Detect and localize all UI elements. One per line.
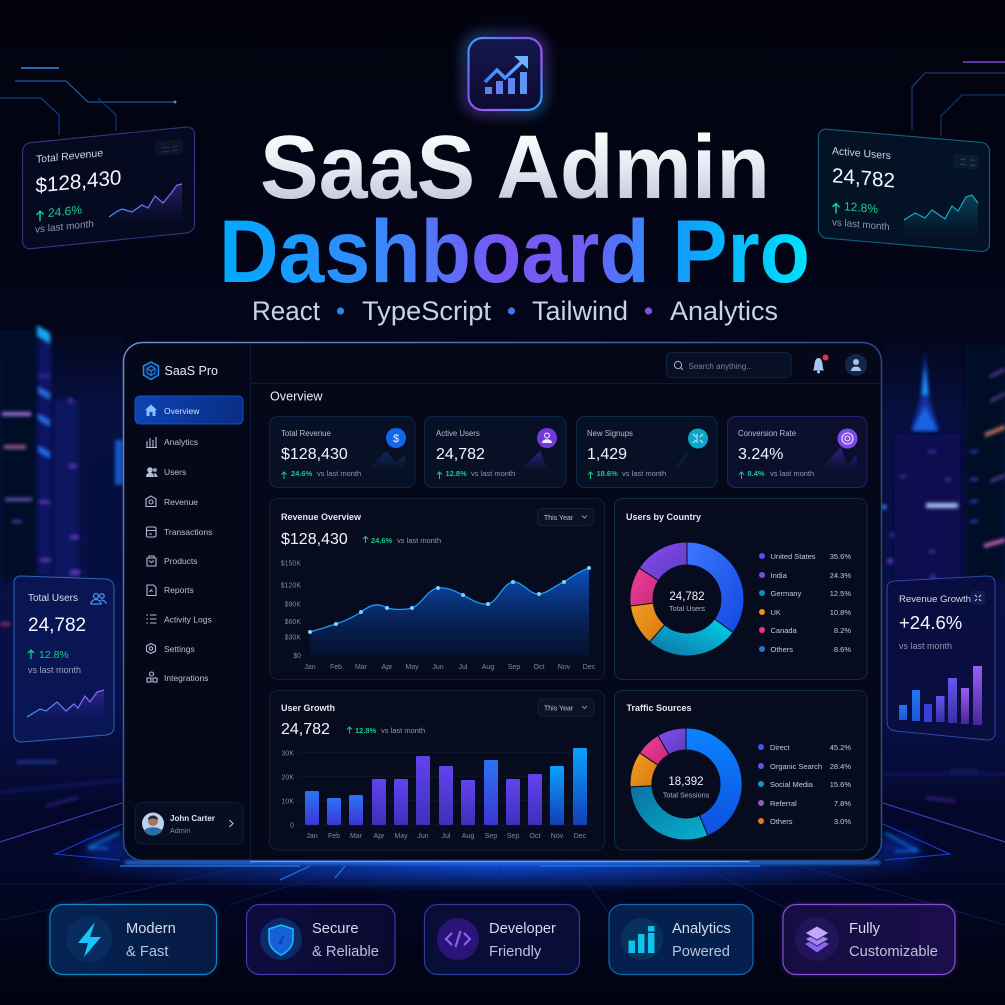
year filter: This Year [544,706,574,712]
line chart axes: Aug [482,664,494,671]
traffic legend: 15.6% [830,780,851,789]
nav: integrations [147,672,208,683]
panel: users by country [614,498,867,680]
nav: products [147,556,198,566]
overview heading: Overview [270,390,323,404]
country legend: 8.6% [834,645,851,654]
panel: user growth [270,690,604,850]
traffic legend: Others [770,817,793,826]
bar axes: 30K [282,750,294,758]
bar axes: Jan [306,833,318,840]
title: SaaS Admin [260,118,770,218]
floating card: revenue growth: vs last month [899,641,952,651]
floating card: total users: 12.8% [39,649,69,661]
bell icon [813,354,828,374]
line chart axes: $120K [281,582,301,590]
panel: revenue overview: Revenue Overview [281,512,362,522]
city skyline left [0,320,125,808]
kpi: total revenue: Total Revenue [281,429,331,438]
floating card: revenue growth: Revenue Growth [899,594,971,605]
traffic legend: Organic Search [770,762,822,771]
feature: secure and reliable: Secure [312,921,359,937]
floating card: active users: vs last month [832,217,890,233]
kpi: total revenue: vs last month [317,469,361,478]
traffic legend [758,743,851,826]
feature: developer friendly: Developer [489,921,556,937]
title: Dashboard Pro [219,201,810,301]
kpi: conversion rate: Conversion Rate [738,429,796,438]
dashboard window [124,342,882,860]
line chart axes [281,560,596,671]
line chart axes: $60K [285,619,301,626]
subtitle tech stack: React [252,296,320,326]
feature: developer friendly: Friendly [489,944,542,960]
panel: revenue overview: 24.6% [371,536,393,545]
traffic legend: Direct [770,743,791,752]
panel: traffic sources [614,690,867,850]
floating card: total users: vs last month [28,665,81,675]
circuit lines right [912,62,1005,136]
nav: users: Users [164,467,186,477]
bar axes: May [394,833,408,840]
feature: analytics powered: Powered [672,944,730,960]
panel: user growth: 24,782 [281,721,330,738]
traffic legend: Social Media [770,780,814,789]
feature: developer friendly [424,904,580,974]
country legend [759,552,851,654]
bar axes: Sep [485,833,497,840]
floating card: active users: 12.8% [844,199,878,216]
neon floor [0,803,1005,925]
kpi: conversion rate [728,416,867,488]
nav: integrations: Integrations [164,673,208,683]
panel: revenue overview: vs last month [397,536,441,545]
year filter [538,699,594,716]
floating card: active users: 24,782 [832,164,895,193]
floating card: total users: Total Users [28,593,78,604]
kpi: new signups: vs last month [622,469,666,478]
feature: secure and reliable [246,904,395,974]
kpi: total revenue: $128,430 [281,446,348,463]
feature: analytics powered [609,904,753,974]
floating card: revenue growth: +24.6% [899,612,962,633]
bar axes: Feb [328,833,340,840]
year filter [538,508,594,526]
line chart axes: Mar [355,664,368,671]
bar axes: 20K [282,774,294,782]
user profile box: John Carter [170,814,215,823]
kpi: active users: vs last month [471,469,515,478]
panel: user growth: vs last month [381,726,425,735]
user profile box: Admin [170,826,190,835]
kpi: new signups: 1,429 [587,446,627,463]
brand logo: SaaS Pro [164,364,218,378]
country legend: 10.8% [830,608,851,617]
panel: traffic sources: Traffic Sources [626,703,692,713]
floating card: total revenue: Total Revenue [36,147,103,166]
nav: activity logs: Activity Logs [164,614,212,624]
line chart axes: $150K [281,560,301,568]
feature: fully customizable: Customizable [849,944,938,960]
title [219,118,810,301]
bar axes: Mar [350,833,363,840]
country donut: 24,782 [669,591,705,603]
feature: modern and fast [50,904,216,974]
feature: modern and fast: Modern [126,921,176,937]
nav: overview active: Overview [164,406,200,416]
floating card: active users [818,129,990,252]
kpi: conversion rate: 3.24% [738,446,783,463]
revenue area line [308,566,591,655]
traffic legend: 28.4% [830,762,851,771]
subtitle tech stack: Analytics [670,296,778,326]
floating card: total revenue: $128,430 [36,166,121,198]
country legend: Others [770,645,793,654]
kpi: new signups: New Signups [587,429,633,438]
top bar [666,352,867,378]
traffic legend: Referral [770,799,797,808]
country legend: India [770,571,788,580]
bar axes: Aug [462,833,474,840]
line chart axes: Jul [459,664,468,671]
feature: fully customizable: Fully [849,921,881,937]
nav: users [146,467,186,477]
floating card: total revenue: 24.6% [48,203,82,220]
floating card: active users: Active Users [832,145,891,162]
country legend: 12.5% [830,589,851,598]
nav: revenue: Revenue [164,497,198,507]
nav: settings: Settings [164,644,195,654]
line chart axes: Apr [382,664,393,671]
bar axes: Oct [530,833,540,840]
bar axes: Dec [574,833,587,840]
bar axes: Sep [507,833,519,840]
country legend: United States [770,552,816,561]
floating card: total users: 24,782 [28,615,86,636]
nav: reports: Reports [164,585,194,595]
traffic donut: 18,392 [668,776,704,788]
kpi: total revenue [270,416,415,488]
kpi: active users: 12.8% [446,469,467,478]
line chart axes: Sep [508,664,520,671]
floating card: revenue growth [887,576,995,740]
feature: analytics powered: Analytics [672,921,731,937]
bar axes: Nov [551,833,564,840]
subtitle tech stack [252,296,778,326]
country legend: 8.2% [834,626,851,635]
line chart axes: Dec [583,664,596,671]
profile icon [845,354,867,376]
kpi: total revenue: 24.6% [291,469,313,478]
brand logo [144,362,218,380]
nav: revenue [146,496,198,507]
kpi: new signups: 18.6% [596,469,618,478]
traffic legend: 45.2% [830,743,851,752]
kpi: conversion rate: vs last month [770,469,814,478]
bar axes: 10K [282,798,294,806]
kpi: new signups [576,416,717,488]
bar axes: Jul [442,833,451,840]
kpi: active users [424,416,566,488]
search box [666,352,791,378]
bar axes: Apr [374,833,385,840]
traffic donut [630,728,742,840]
nav: products: Products [164,556,198,566]
circuit lines left [0,68,176,135]
sidebar [135,362,243,844]
growth bars [305,748,587,825]
feature: fully customizable [783,904,955,974]
bar axes: 0 [290,822,294,830]
bar axes [282,750,592,840]
line chart axes: $90K [285,602,301,608]
nav: transactions: Transactions [164,527,212,537]
floating card: total users [14,576,114,742]
country legend: Germany [770,589,802,598]
line chart axes: May [405,664,419,671]
nav: reports [147,585,194,596]
floating card: total revenue: vs last month [35,219,94,236]
user profile box [135,802,243,844]
country legend: UK [770,608,781,617]
city skyline right [882,330,1005,803]
bar axes: Jun [417,833,429,840]
search box: Search anything... [688,362,753,371]
feature: secure and reliable: & Reliable [312,944,379,960]
line chart axes: Jan [304,664,316,671]
kpi: active users: 24,782 [436,446,485,463]
nav: analytics: Analytics [164,437,198,447]
country donut [630,542,744,656]
panel: user growth: 12.8% [355,726,377,735]
nav: settings [146,644,195,654]
year filter: This Year [544,515,574,522]
nav: analytics [146,437,198,448]
line chart axes: $0 [293,653,301,660]
country legend: 35.6% [830,552,851,561]
line chart axes: Nov [558,664,571,671]
kpi: conversion rate: 8.4% [748,469,765,478]
line chart axes: Oct [534,664,544,671]
panel: users by country: Users by Country [626,512,701,522]
line chart axes: $30K [285,634,301,642]
panel: revenue overview: $128,430 [281,531,348,548]
feature: modern and fast: & Fast [126,944,168,960]
window frame [124,342,882,860]
line chart axes: Feb [330,664,342,671]
kpi: active users: Active Users [436,429,480,438]
logo icon [466,36,543,112]
traffic donut: Total Sessions [663,790,710,800]
panel: user growth: User Growth [281,703,335,713]
country legend: Canada [770,626,798,635]
country legend: 24.3% [830,571,851,580]
traffic legend: 7.8% [834,799,851,808]
subtitle tech stack: Tailwind [532,296,628,326]
floating card: total revenue [22,126,194,249]
country donut: Total Users [669,604,705,613]
line chart axes: Jun [432,664,444,671]
panel: revenue overview [270,498,604,680]
subtitle tech stack: TypeScript [362,296,491,326]
kpi: total revenue: $ [393,433,399,445]
nav: overview active [135,396,243,424]
traffic legend: 3.0% [834,817,851,826]
